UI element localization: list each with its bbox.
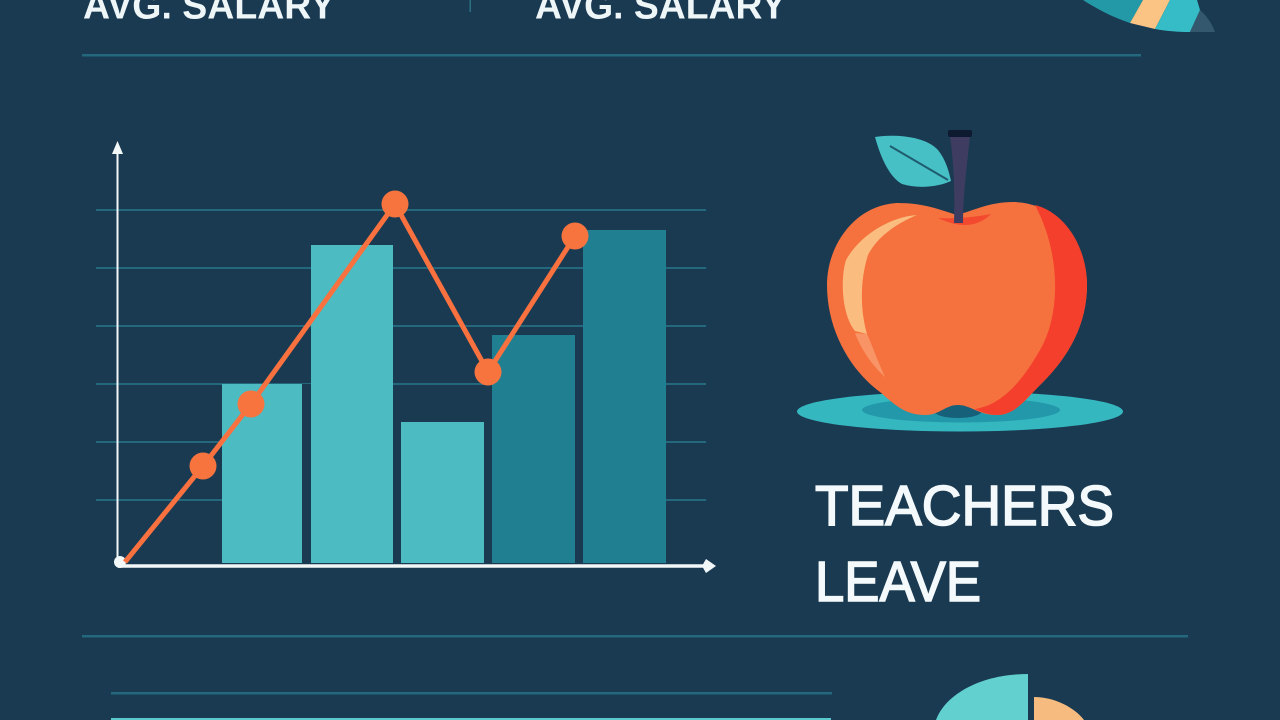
x axis (118, 564, 706, 568)
apple shadow side (975, 205, 1087, 415)
apple body (827, 202, 1087, 415)
apple stem (950, 136, 970, 223)
bar 4 (492, 335, 575, 563)
heading: teachers leave: LEAVE (815, 550, 981, 614)
heading: teachers leave (815, 474, 1114, 614)
bar 1 (222, 384, 302, 563)
trend points (190, 190, 588, 480)
icon: apple (797, 130, 1123, 432)
apple base (797, 392, 1123, 432)
bar 5 (583, 230, 666, 563)
header: salary labels (83, 0, 786, 28)
trend line (125, 204, 575, 562)
y axis (116, 150, 118, 563)
heading: teachers leave: TEACHERS (815, 474, 1114, 538)
bar 2 (311, 245, 393, 563)
icon: pencil tip (1083, 0, 1215, 32)
apple leaf (875, 136, 951, 187)
bar 3 (401, 422, 484, 563)
icon: pie chart fragment (936, 674, 1084, 720)
combo chart: bars and line (96, 141, 716, 573)
apple highlight (843, 215, 917, 334)
apple dimple (938, 214, 991, 225)
